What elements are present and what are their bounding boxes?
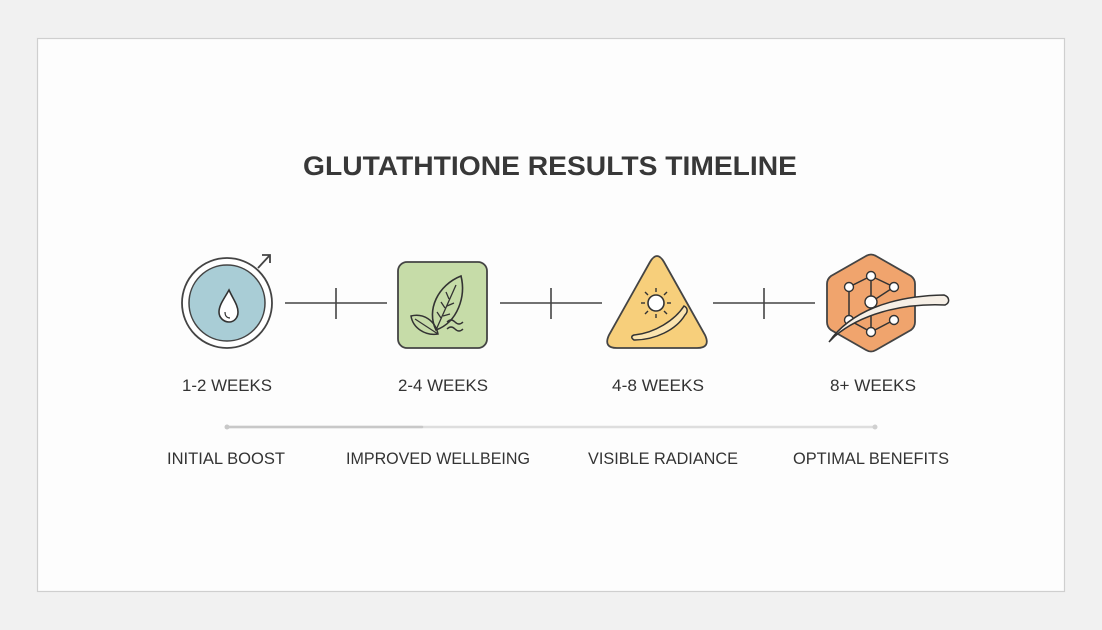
icon: sun triangle <box>607 256 707 348</box>
phase labels: IMPROVED WELLBEING <box>346 449 530 468</box>
connector 1 <box>285 288 387 319</box>
connector 2 <box>500 288 602 319</box>
title: GLUTATHTIONE RESULTS TIMELINE <box>303 151 797 181</box>
phase labels: VISIBLE RADIANCE <box>588 449 738 468</box>
progress line <box>224 424 878 430</box>
week labels: 2-4 WEEKS <box>398 376 488 395</box>
week labels: 1-2 WEEKS <box>182 376 272 395</box>
phase labels: OPTIMAL BENEFITS <box>793 449 949 468</box>
connector 3 <box>713 288 815 319</box>
phase labels: INITIAL BOOST <box>167 449 285 468</box>
phase labels <box>167 449 949 468</box>
week labels: 4-8 WEEKS <box>612 376 704 395</box>
icon: leaf square <box>398 262 487 348</box>
icon: molecule hexagon <box>827 254 949 352</box>
week labels <box>182 376 916 395</box>
icon: water drop circle <box>182 255 272 348</box>
week labels: 8+ WEEKS <box>830 376 916 395</box>
